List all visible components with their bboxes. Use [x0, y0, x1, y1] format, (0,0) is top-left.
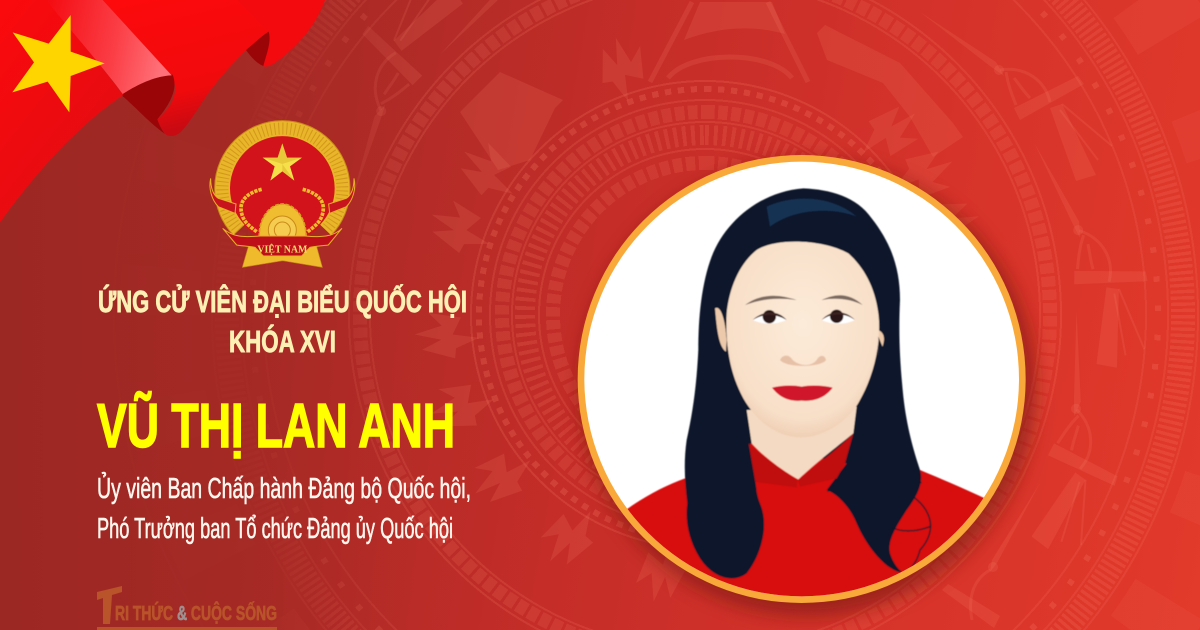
emblem rice wreath: [215, 121, 350, 235]
hair front right: [827, 337, 922, 492]
emblem gear: [259, 204, 306, 244]
emblem rice ears: [241, 189, 323, 232]
dress: [627, 442, 984, 596]
motif: long-beaked birds: [291, 0, 1200, 566]
neck: [747, 407, 857, 479]
publisher logo: [97, 586, 277, 630]
logo T mark: [97, 586, 122, 624]
flag: [0, 0, 325, 223]
motif: stilt house right: [817, 25, 963, 157]
flag star: [12, 15, 105, 112]
heading line 1: ỨNG CỬ VIÊN ĐẠI BIỂU QUỐC HỘI: [98, 283, 467, 319]
middle flag panel: [100, 0, 269, 136]
motif: feathered figures: [412, 31, 998, 606]
motif: lower right bird, cropped at frame: [942, 483, 1040, 628]
emblem base: [242, 247, 322, 267]
bronze drum motifs: [291, 0, 1200, 628]
collar: [747, 433, 853, 487]
position line 1: Ủy viên Ban Chấp hành Đảng bộ Quốc hội,: [97, 471, 471, 505]
bronze drum ring pattern: [310, 0, 1199, 630]
dark fold right: [246, 32, 270, 66]
emblem side ribbons: [210, 178, 355, 213]
candidate position: [97, 471, 471, 545]
position line 2: Phó Trưởng ban Tổ chức Đảng ủy Quốc hội: [97, 513, 453, 545]
logo strip: [97, 627, 277, 630]
flag highlight band: [46, 0, 172, 94]
portrait backdrop: [584, 162, 1019, 596]
motif: boat arch top: [650, 2, 808, 82]
heading: candidate title: [98, 283, 467, 359]
nose: [780, 356, 826, 366]
national emblem: [210, 121, 355, 267]
loose hair strands: [894, 496, 932, 568]
emblem banner text: VIỆT NAM: [257, 242, 308, 255]
left background fade: [0, 0, 420, 630]
portrait: [578, 155, 1036, 617]
emblem star: [263, 143, 302, 181]
eyes: [753, 313, 855, 324]
heading line 2: KHÓA XVI: [229, 323, 336, 359]
logo text: RI THỨC & CUỘC SỐNG: [115, 601, 277, 625]
portrait ring: [578, 155, 1026, 603]
motif: stilt house left: [460, 72, 563, 170]
back flag ribbon: [233, 0, 325, 67]
portrait shadow: [580, 160, 1036, 616]
hair back: [685, 188, 921, 578]
eyebrows: [745, 295, 863, 305]
ears: [715, 308, 884, 357]
face: [726, 242, 879, 437]
main flag panel: [0, 0, 123, 223]
hair front left: [746, 441, 757, 490]
emblem banner: [223, 228, 342, 256]
lips: [772, 386, 833, 401]
hair highlight: [767, 199, 857, 227]
dark fold left: [121, 75, 174, 134]
candidate name: VŨ THỊ LAN ANH: [97, 392, 455, 461]
emblem red field: [229, 135, 336, 242]
portrait figure: [627, 188, 985, 617]
